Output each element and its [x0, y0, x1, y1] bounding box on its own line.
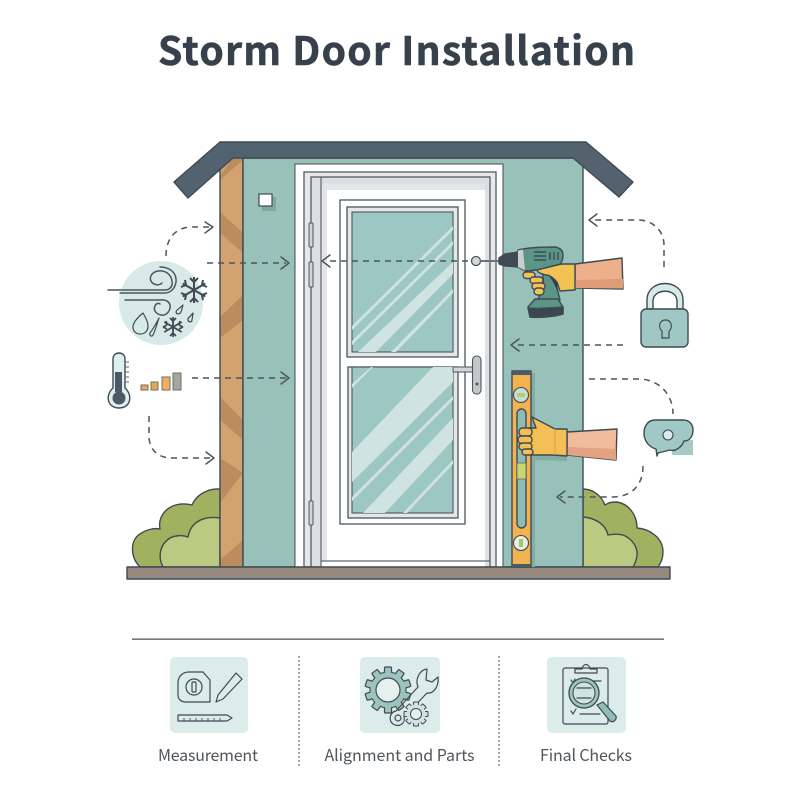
dotted divider 1 [298, 656, 300, 768]
wind lines [108, 267, 176, 315]
label: alignment and parts: Alignment and Parts [324, 742, 474, 766]
door assembly [295, 164, 503, 567]
bush: right [583, 489, 663, 567]
icon: drill with hand [472, 247, 623, 317]
drill handle [537, 272, 560, 300]
ground [127, 567, 670, 579]
icon: weather [108, 261, 207, 345]
panel: measurement [158, 657, 258, 766]
footer divider [132, 638, 664, 640]
dashed arrow: temperature to wall [192, 372, 289, 384]
icon: padlock [641, 284, 688, 347]
temperature bars [141, 373, 181, 390]
wall siding [243, 158, 583, 567]
window frame [340, 200, 465, 524]
tape measure [178, 672, 210, 702]
clipboard [563, 668, 608, 724]
title: Storm Door Installation [158, 21, 635, 77]
dashed arrow: lock to wall top [589, 214, 664, 267]
icon tile: measurement [170, 657, 248, 733]
wood sheathing [220, 158, 243, 567]
large gear [365, 667, 411, 713]
glove [537, 264, 575, 291]
drill body [518, 247, 563, 271]
snowflake: small [163, 317, 183, 337]
dashed arrow: drill to hinge side [322, 255, 468, 267]
house illustration [127, 142, 670, 579]
glove [527, 417, 567, 456]
dotted divider 2 [498, 656, 500, 768]
dashed arrow: temperature to sheathing [149, 416, 214, 464]
wall vent [259, 194, 276, 211]
door handle [453, 356, 481, 394]
icon tile: final checks [547, 657, 626, 733]
snowflake: large [181, 277, 207, 303]
bush: left [132, 489, 220, 567]
raindrop [133, 313, 148, 334]
arm [575, 258, 623, 289]
glass: upper [352, 212, 453, 352]
battery [528, 299, 563, 317]
panel: alignment and parts [324, 657, 474, 766]
icon tile: alignment [360, 657, 440, 733]
screw and bit [472, 256, 480, 266]
pencil [216, 673, 242, 702]
icon: thermometer [108, 353, 130, 408]
wrench [390, 669, 438, 725]
label: final checks: Final Checks [540, 742, 632, 766]
dashed arrow: feedback from level [589, 379, 673, 414]
dashed arrow: weather to sheathing [166, 222, 213, 256]
small gear [404, 702, 428, 726]
icon: spirit level with hand [512, 371, 617, 567]
hinges [309, 223, 313, 525]
arm [567, 429, 617, 460]
magnifier [597, 702, 616, 722]
roof [174, 142, 633, 198]
ruler [178, 715, 232, 721]
chuck [499, 252, 518, 267]
dashed arrow: feedback to level [557, 466, 643, 503]
label: measurement: Measurement [158, 742, 258, 766]
icon: speech bubble [644, 420, 693, 456]
dashed arrow: weather to wall [207, 257, 289, 269]
panel: final checks [540, 657, 632, 766]
glass: lower [352, 367, 453, 513]
dashed arrow: lock to wall [511, 339, 623, 351]
